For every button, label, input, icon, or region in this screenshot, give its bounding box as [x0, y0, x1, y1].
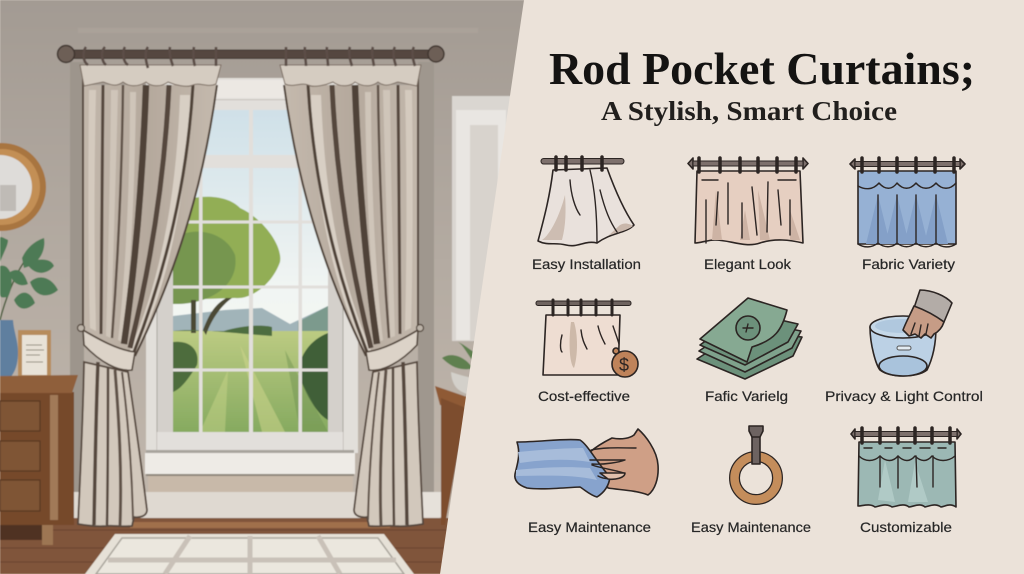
door trim: [420, 96, 512, 517]
icon: wooden curtain ring: [734, 426, 778, 500]
label: Fabric Variety: [862, 256, 955, 272]
mirror: [0, 143, 46, 231]
right content panel: [440, 0, 1024, 574]
label: Easy Installation: [532, 256, 641, 272]
rug: [85, 534, 414, 574]
picture frame: [18, 330, 51, 380]
dresser: [0, 375, 78, 545]
label: Easy Maintenance: [528, 519, 651, 535]
label: Privacy & Light Control: [825, 388, 983, 404]
icon: easy installation curtain: [538, 157, 634, 246]
baseboard: [70, 492, 440, 518]
icon: hand with blue cloth: [515, 429, 658, 497]
icon: stack of money: [697, 298, 802, 379]
right curtain: [280, 65, 424, 526]
side table and plant: [435, 342, 475, 525]
icon: customizable curtain: [851, 428, 961, 507]
subtitle: A Stylish, Smart Choice: [601, 96, 897, 126]
floor: [0, 518, 480, 574]
label: Customizable: [860, 519, 952, 535]
icon: fabric variety curtain: [850, 158, 965, 247]
wall: [0, 0, 530, 525]
curtain rings: [84, 47, 415, 68]
muntins: [157, 100, 343, 450]
tree and landscape: [173, 197, 328, 432]
room background illustration: [0, 0, 530, 574]
label: Cost-effective: [538, 388, 630, 404]
label: Elegant Look: [704, 256, 792, 272]
label: Easy Maintenance: [691, 519, 811, 535]
title: Rod Pocket Curtains;: [549, 43, 975, 94]
label: Fafic Varielg: [705, 388, 788, 404]
icon: glass with hand: [870, 290, 952, 376]
icon: cost-effective curtain with coin: $: [619, 355, 629, 375]
potted plant left: [0, 237, 58, 378]
curtain rod: [58, 46, 444, 62]
icon: elegant look curtain: [688, 158, 808, 245]
window: [145, 78, 358, 492]
icon: cost-effective curtain with coin: [536, 300, 638, 377]
left curtain: [78, 65, 221, 526]
